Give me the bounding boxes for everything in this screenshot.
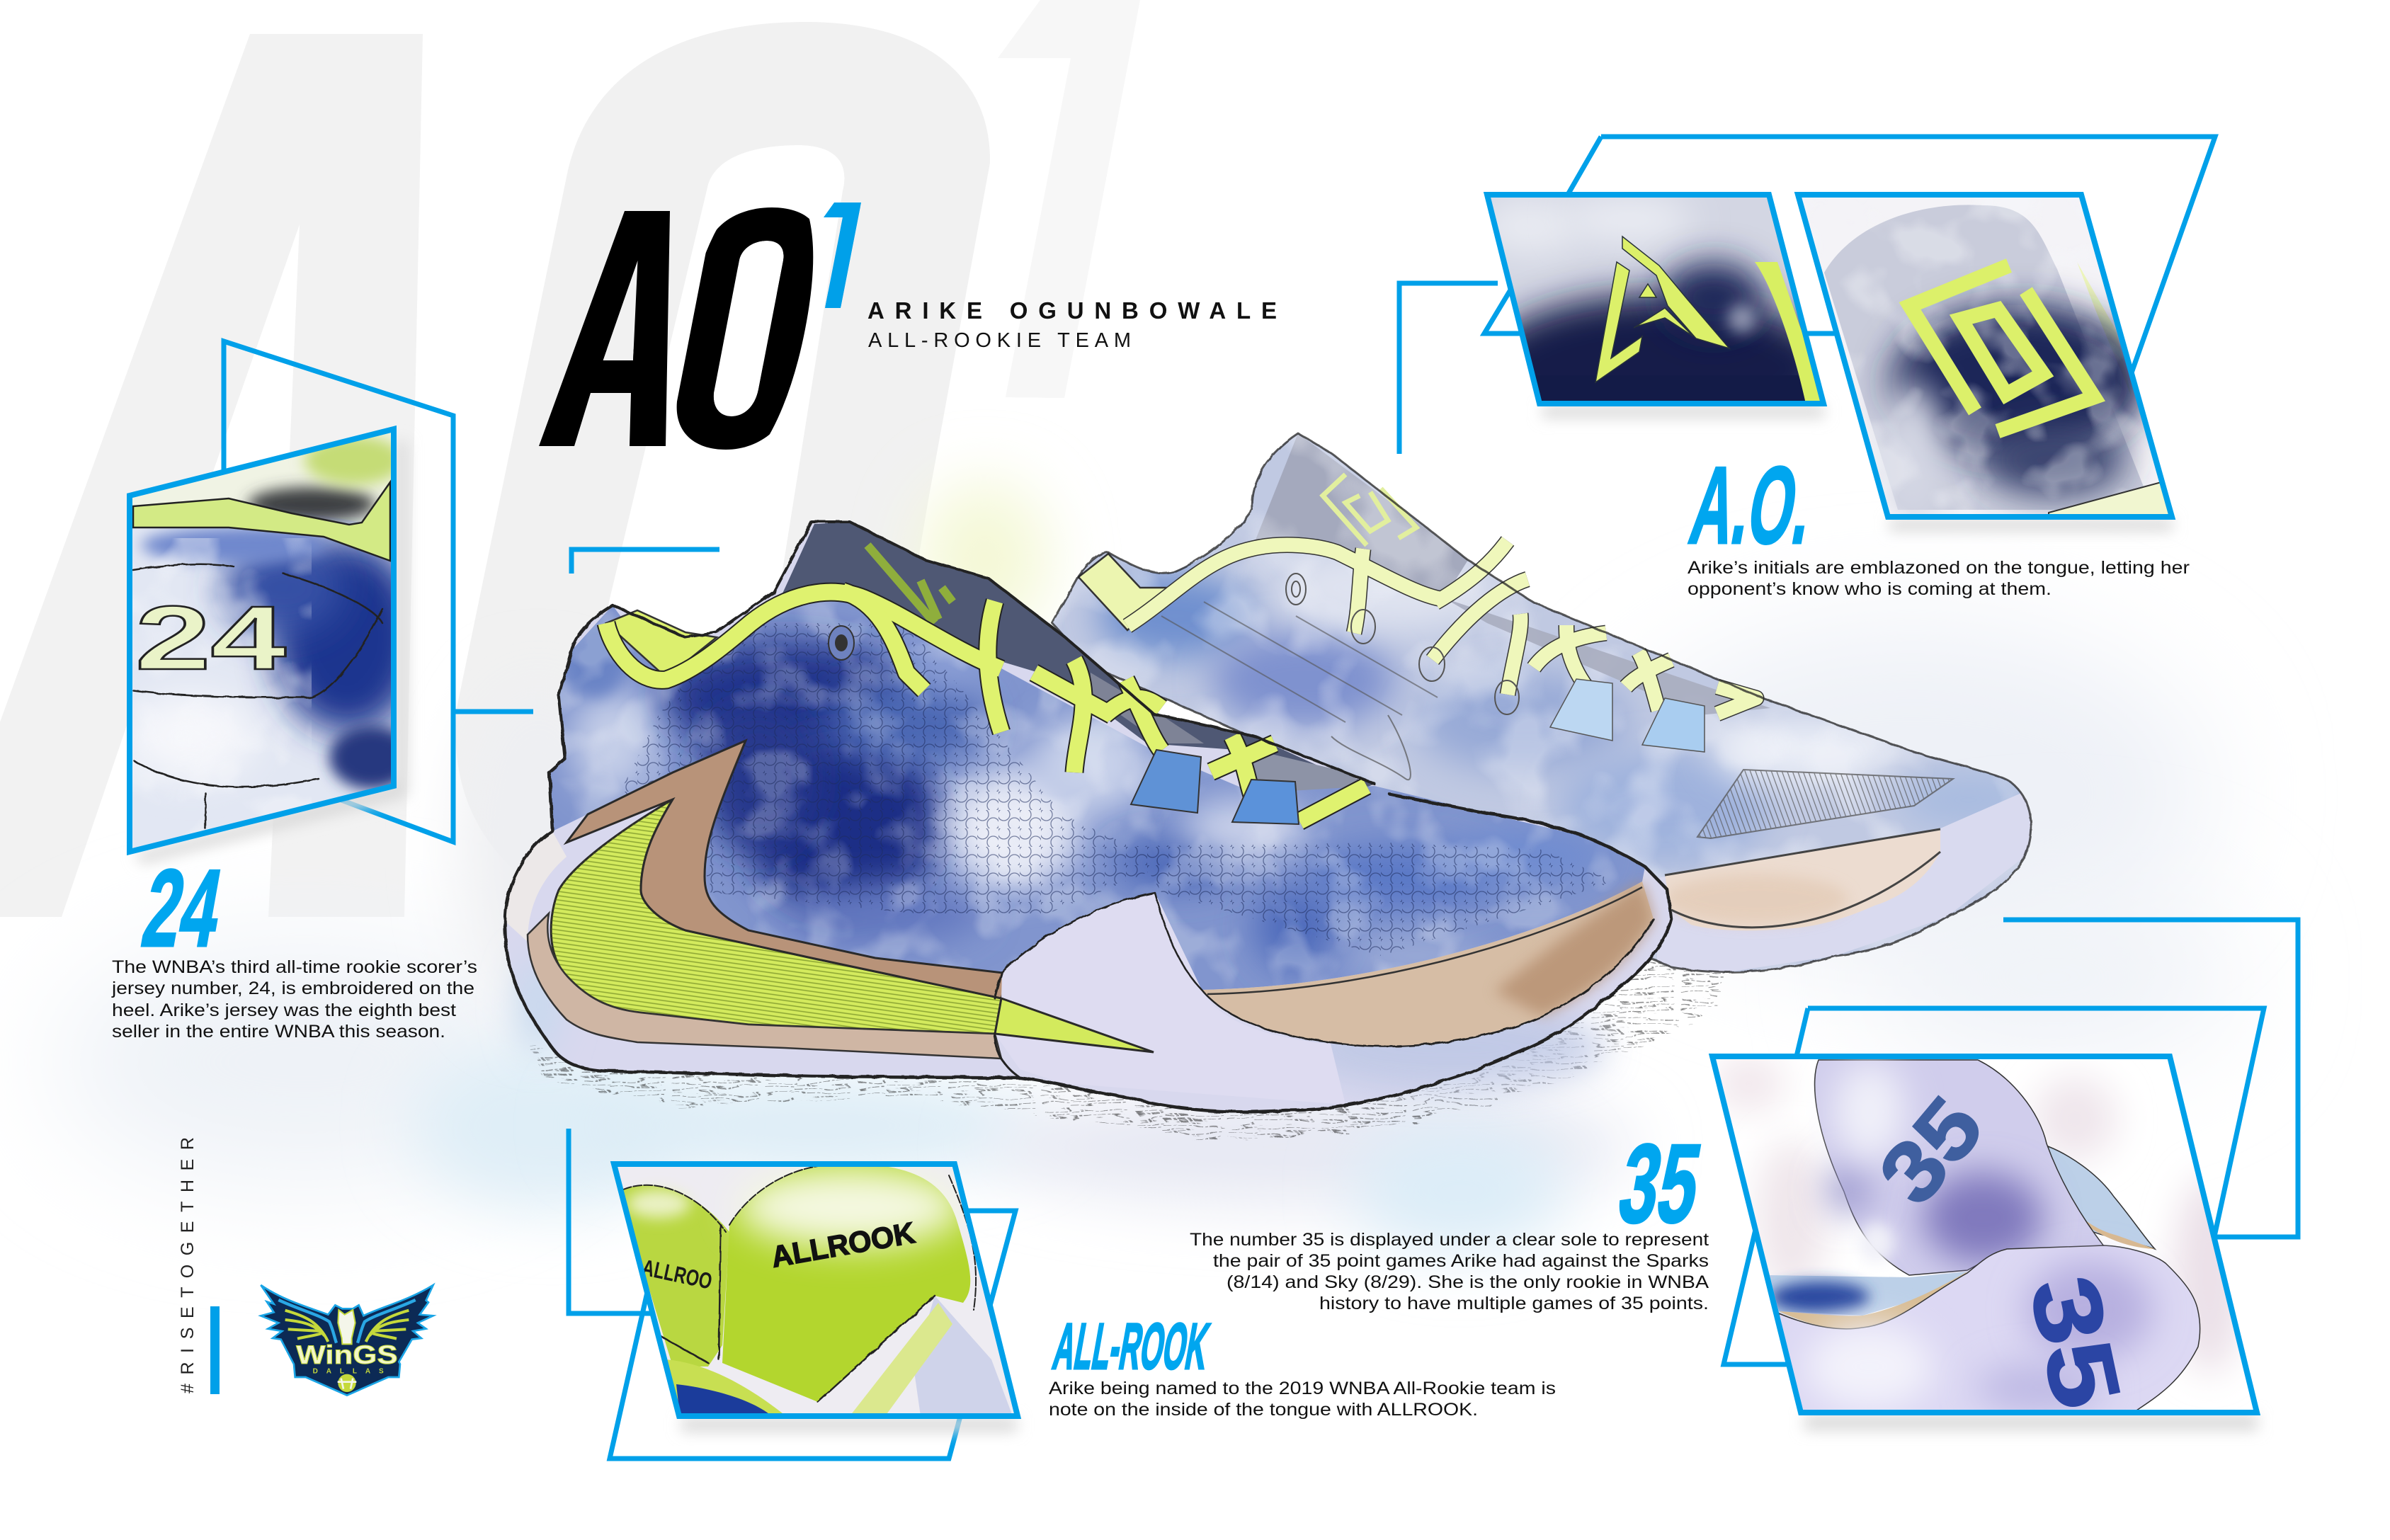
- 24 body text: jersey number, 24, is embroidered on the: [111, 979, 474, 998]
- hashtag: #RISETOGETHER: #RISETOGETHER: [178, 1137, 198, 1393]
- logo horse head: [338, 1310, 355, 1344]
- connector near shoe heel: [571, 549, 719, 574]
- embroidered 24: 24: [135, 588, 286, 689]
- main title: AO1: 1: [810, 176, 883, 338]
- inset: heel with 24: [127, 425, 421, 852]
- main title: AO1: O: [655, 144, 833, 515]
- inset: letter A embroidery: [1480, 195, 1834, 443]
- front logo on tongue: [867, 545, 952, 623]
- rear shoe tabs: [1550, 679, 1705, 752]
- heel counter and collar lime: [606, 610, 717, 678]
- ALL-ROOK body text: note on the inside of the tongue with ALLROOK.: [1049, 1400, 1478, 1420]
- swoosh: lime inner: [551, 799, 1154, 1052]
- heel eyelet: [829, 626, 854, 660]
- ALLROOK back frame: [610, 1211, 1015, 1459]
- ground hatching under shoe: [528, 920, 1735, 1140]
- shadow for 35 inset: [1804, 1415, 2258, 1430]
- subtitle: [867, 297, 1277, 352]
- ALL-ROOK body text: [1049, 1379, 1556, 1420]
- 24 heading: 24: [135, 848, 230, 970]
- A.O. heading: A.O.: [1683, 445, 1822, 567]
- main title: AO1: A: [525, 143, 724, 515]
- 24 back frame: [224, 341, 453, 842]
- callout: ALLROOK inset: ALL-ROOK: [1049, 1310, 1214, 1383]
- callout: A.O. insets: [1399, 137, 2215, 599]
- logo wordmark: WinGS: [296, 1340, 398, 1369]
- midfoot copper: [1202, 882, 1654, 1046]
- 35 connector: [2003, 920, 2298, 1237]
- rear shoe lace band and laces: [1127, 541, 1756, 714]
- shoe illustration: front shoe: [496, 496, 1700, 1112]
- watercolor splash background: [57, 481, 2238, 1253]
- subtitle: ARIKE OGUNBOWALE: [867, 297, 1277, 324]
- 24 body text: heel. Arike’s jersey was the eighth best: [112, 1000, 456, 1020]
- A.O. body text: [1688, 558, 2190, 599]
- inset: outsole with 35: 35: [2010, 1267, 2141, 1418]
- 35 back frame: [1724, 1008, 2264, 1364]
- shadow for 24 inset: [135, 439, 407, 864]
- hex mesh pattern: [616, 623, 1615, 956]
- front shoe silhouette and sole: [505, 522, 1671, 1112]
- lower copper stripe: [528, 913, 1001, 1059]
- callout: ALLROOK inset: [569, 1129, 1556, 1459]
- 24 body text: seller in the entire WNBA this season.: [112, 1022, 445, 1042]
- blue tabs: [1131, 750, 1299, 824]
- 35 body text: (8/14) and Sky (8/29). She is the only rookie in WNBA: [1227, 1272, 1709, 1292]
- swoosh: copper stripe: [567, 741, 1009, 998]
- shadow for ALLROOK inset: [681, 1418, 1017, 1432]
- rear shoe toe vent: [1697, 770, 1953, 838]
- inset: outsole with 35: 35: [1860, 1080, 2001, 1222]
- 35 body text: history to have multiple games of 35 points.: [1319, 1294, 1709, 1313]
- rear shoe collar: [1079, 554, 1204, 630]
- inset: tongue with ALLROOK: ALLROO: [640, 1255, 715, 1294]
- midsole disc: [995, 893, 1345, 1105]
- 35 body text: [1190, 1230, 1709, 1313]
- inset: letter O embroidery: [1798, 195, 2172, 524]
- 35 body text: the pair of 35 point games Arike had against the Sparks: [1213, 1251, 1709, 1271]
- A.O. back frame: [1484, 137, 2215, 425]
- rear shoe outline: [1052, 433, 2031, 972]
- 35 heading: 35: [1611, 1121, 1709, 1246]
- shoe illustration: rear shoe: [1051, 432, 2032, 974]
- background letters: AO1: [0, 0, 1236, 1177]
- logo: Dallas Wings: [261, 1285, 433, 1396]
- ALL-ROOK body text: Arike being named to the 2019 WNBA All-Rookie team is: [1049, 1379, 1556, 1398]
- 24 body text: The WNBA’s third all-time rookie scorer’s: [112, 957, 477, 977]
- inset: outsole with 35: [1712, 1055, 2257, 1418]
- rear shoe cloud texture: [991, 425, 2054, 991]
- A.O. connector: [1399, 283, 1498, 454]
- accent bar: [210, 1306, 220, 1394]
- 24 connector: [453, 709, 533, 714]
- rear shoe eyelets and details: [1161, 574, 1940, 928]
- rear shoe logo on tongue: [1323, 474, 1416, 545]
- front tongue: [783, 522, 1375, 797]
- 35 body text: The number 35 is displayed under a clear sole to represent: [1190, 1230, 1709, 1250]
- 24 body text: [111, 957, 477, 1042]
- callout: 24 inset: [111, 341, 533, 1042]
- front upper colour blobs: [557, 602, 1616, 984]
- A monogram: [1595, 236, 1729, 382]
- front shoe pencil outline: [505, 522, 1671, 1112]
- logo wings feathers: [278, 1300, 416, 1343]
- main title: AO1: [525, 143, 883, 515]
- ALLROOK connector: [569, 1129, 651, 1313]
- callout: 35 inset: [1190, 920, 2298, 1430]
- embroidered ALLROOK: ALLROOK: [768, 1216, 917, 1274]
- logo basketball: [338, 1374, 356, 1392]
- O monogram: [1910, 266, 2094, 431]
- A.O. body text: opponent’s know who is coming at them.: [1688, 579, 2052, 599]
- inset: tongue with ALLROOK: [602, 1164, 1018, 1416]
- A.O. body text: Arike’s initials are emblazoned on the tongue, letting her: [1688, 558, 2190, 578]
- logo: Dallas Wings: DALLAS: [313, 1367, 384, 1375]
- front upper: [550, 590, 1645, 990]
- subtitle: ALL-ROOKIE TEAM: [868, 329, 1131, 352]
- front lace band and laces: [606, 591, 1367, 821]
- shadows for A.O. insets: [1542, 405, 2173, 531]
